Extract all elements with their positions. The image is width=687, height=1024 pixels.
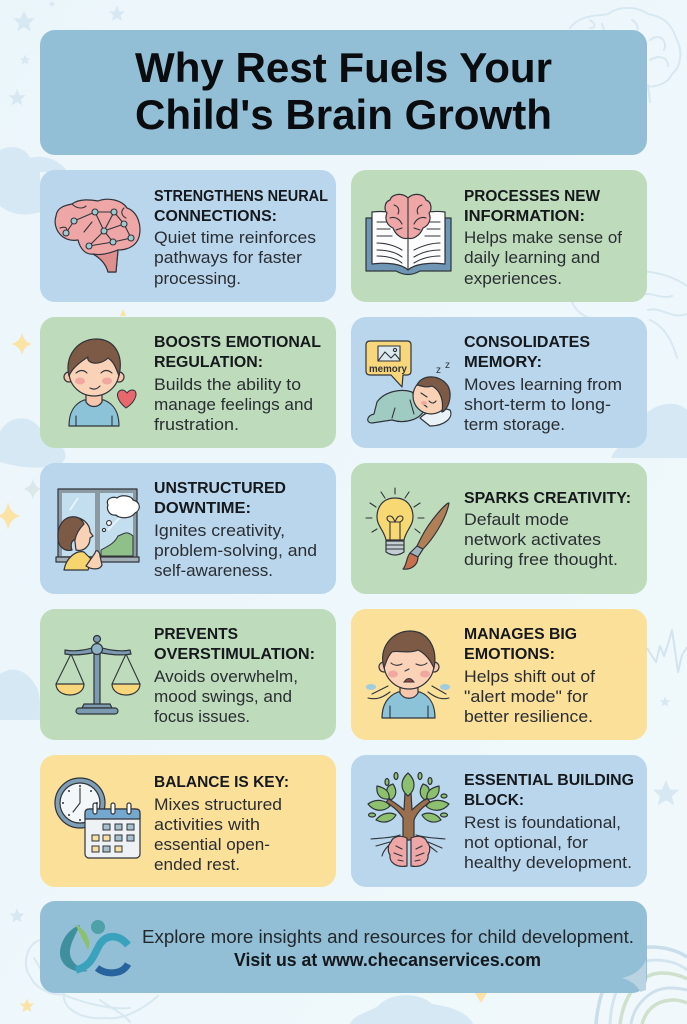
panel: boosts emotional regulation — [40, 317, 336, 448]
footer text: Explore more insights and resources for child development. — [142, 926, 634, 947]
panel text: manage feelings and — [154, 396, 313, 414]
panel text: frustration. — [154, 416, 239, 434]
panel text: Helps shift out of — [464, 668, 595, 686]
panel text: Rest is foundational, — [464, 814, 621, 832]
panel: strengthens neural connections — [40, 170, 336, 302]
footer link: Visit us at www.checanservices.com — [234, 950, 541, 970]
icon: sleeping baby with memory bubble: z — [436, 365, 441, 376]
icon: clock and calendar — [55, 778, 140, 858]
icon: open book with brain — [366, 194, 451, 274]
decoration: brain outline bottom left — [26, 940, 158, 1022]
panel text: pathways for faster — [154, 249, 303, 267]
panel text: STRENGTHENS NEURAL — [154, 188, 328, 205]
panel text: Moves learning from — [464, 376, 622, 394]
panel text: DOWNTIME: — [154, 500, 251, 517]
panel text: Mixes structured — [154, 796, 282, 814]
panel text: daily learning and — [464, 249, 600, 267]
panel: processes new information — [351, 170, 647, 302]
panel: prevents overstimulation — [40, 609, 336, 740]
panel text: CONNECTIONS: — [154, 208, 277, 225]
decoration: brain outline top right — [570, 8, 680, 102]
panel text: INFORMATION: — [464, 208, 585, 225]
panel: balance is key — [40, 755, 336, 887]
panel text: focus issues. — [154, 708, 250, 726]
panel text: BALANCE IS KEY: — [154, 774, 289, 791]
panel text: "alert mode" for — [464, 688, 589, 706]
panel text: MEMORY: — [464, 354, 542, 371]
panel text: Builds the ability to — [154, 376, 301, 394]
decoration: sparkle on footer — [622, 960, 646, 992]
panel text: self-awareness. — [154, 562, 273, 580]
panel text: healthy development. — [464, 854, 632, 872]
panel text: BLOCK: — [464, 792, 524, 809]
panel text: network activates — [464, 531, 601, 549]
panel text: Default mode — [464, 511, 569, 529]
panel text: not optional, for — [464, 834, 589, 852]
panel text: BOOSTS EMOTIONAL — [154, 334, 321, 351]
panel text: activities with — [154, 816, 260, 834]
panel: unstructured downtime — [40, 463, 336, 594]
panel text: term storage. — [464, 416, 565, 434]
panel text: OVERSTIMULATION: — [154, 646, 315, 663]
panel: essential building block — [351, 755, 647, 887]
title text: Why Rest Fuels Your — [135, 44, 552, 91]
panel text: ended rest. — [154, 856, 240, 874]
title text: Child's Brain Growth — [135, 91, 552, 138]
panel text: processing. — [154, 270, 241, 288]
panel text: experiences. — [464, 270, 562, 288]
decoration: brain outline right — [572, 271, 687, 358]
decoration: rainbow arcs bottom right — [596, 947, 687, 1024]
panel: sparks creativity — [351, 463, 647, 594]
panel text: UNSTRUCTURED — [154, 480, 286, 497]
icon: brain network — [55, 199, 140, 272]
icon: child breathing out — [366, 631, 450, 718]
panel text: ESSENTIAL BUILDING — [464, 772, 634, 789]
footer banner — [40, 901, 647, 993]
panel text: MANAGES BIG — [464, 626, 577, 643]
icon: balance scale — [56, 636, 140, 714]
icon: calm child with heart — [64, 339, 136, 426]
panel text: CONSOLIDATES — [464, 334, 590, 351]
panel text: problem-solving, and — [154, 542, 317, 560]
panel text: SPARKS CREATIVITY: — [464, 490, 631, 507]
icon: sleeping baby with memory bubble: z — [445, 360, 450, 371]
panel text: essential open- — [154, 836, 270, 854]
panel: manages big emotions — [351, 609, 647, 740]
panel text: Helps make sense of — [464, 229, 622, 247]
panel: consolidates memory — [351, 317, 647, 448]
icon: tree with brain roots — [368, 772, 449, 866]
icon: child daydreaming at window — [56, 489, 139, 570]
panel text: REGULATION: — [154, 354, 263, 371]
panel text: short-term to long- — [464, 396, 611, 414]
memory label: memory — [369, 363, 407, 375]
panel text: Avoids overwhelm, — [154, 668, 298, 686]
panel text: PROCESSES NEW — [464, 188, 600, 205]
panel text: during free thought. — [464, 551, 618, 569]
logo — [60, 920, 128, 973]
decoration: pulse line — [647, 630, 687, 672]
panel text: Ignites creativity, — [154, 522, 285, 540]
panel text: PREVENTS — [154, 626, 238, 643]
panel text: EMOTIONS: — [464, 646, 555, 663]
panel text: mood swings, and — [154, 688, 292, 706]
panel text: better resilience. — [464, 708, 593, 726]
icon: light bulb and paintbrush — [366, 488, 449, 569]
panel text: Quiet time reinforces — [154, 229, 316, 247]
title banner — [40, 30, 647, 155]
icon: sleeping baby with memory bubble — [366, 341, 451, 426]
